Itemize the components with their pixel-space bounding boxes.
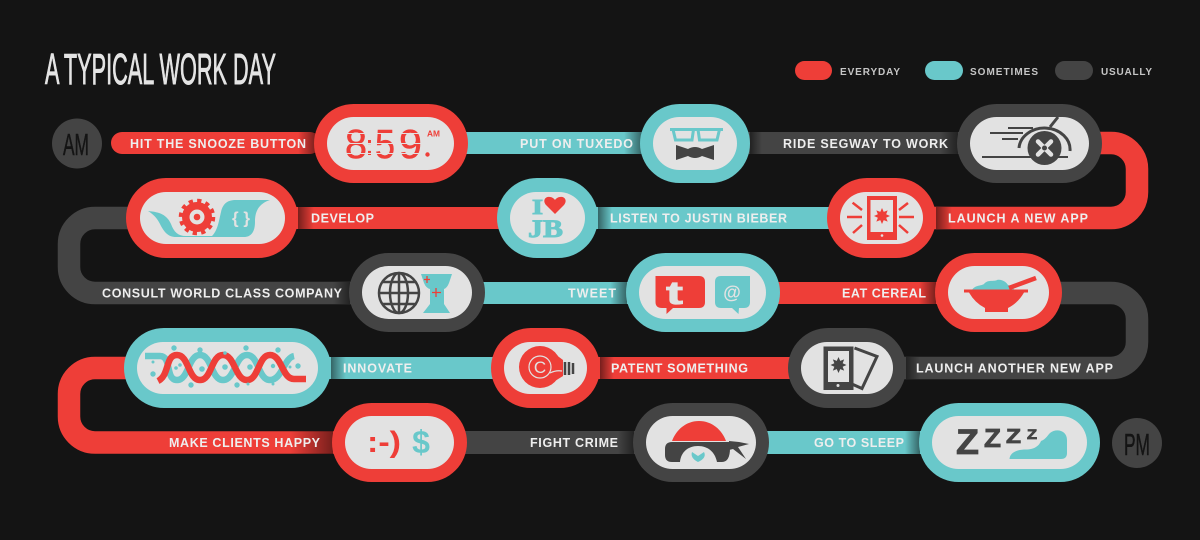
pill: develop gear <box>126 178 298 258</box>
pill: I love JB <box>497 178 598 258</box>
pill: cereal bowl <box>935 253 1062 332</box>
icon: smiley: :-) <box>367 426 401 459</box>
track: launch a new app <box>930 143 1137 229</box>
track: consult world class company <box>69 218 355 304</box>
track: patent something <box>595 357 793 379</box>
icon: letters z: Z <box>956 423 979 462</box>
track: fight crime: FIGHT CRIME <box>530 436 618 450</box>
icon: bowl <box>964 278 1036 312</box>
track: hit the snooze button: HIT THE SNOOZE BUTTON <box>130 137 306 151</box>
track: eat cereal: EAT CEREAL <box>842 286 926 300</box>
icon: at bubble: @ <box>723 282 741 302</box>
track: eat cereal <box>775 282 940 304</box>
track: launch another new app: LAUNCH ANOTHER NEW APP <box>916 362 1113 376</box>
icon: dollar: $ <box>412 424 430 460</box>
track: tweet: TWEET <box>568 286 616 300</box>
track: tweet <box>478 282 631 304</box>
track: launch a new app: LAUNCH A NEW APP <box>948 212 1088 226</box>
icon: clock reading 8:59 AM: AM <box>427 130 440 138</box>
track: patent something: PATENT SOMETHING <box>611 362 748 376</box>
AM marker <box>52 118 102 168</box>
pill: twitter and at <box>626 253 780 332</box>
pill: globe and grail <box>349 253 485 332</box>
pill: phone and tablet <box>788 328 906 408</box>
pill: zzz sleep <box>919 403 1100 482</box>
pill: patent bulb <box>491 328 600 408</box>
icon: letters z <box>956 423 1038 462</box>
icon: clock reading 8:59 AM: 8 <box>345 121 367 167</box>
icon: letters z: Z <box>1027 426 1038 442</box>
legend: USUALLY <box>1101 67 1152 78</box>
icon: I love JB: I <box>532 195 543 219</box>
legend: EVERYDAY <box>840 67 900 78</box>
AM marker: AM <box>63 127 89 162</box>
icon: twitter bubble: t <box>666 275 684 311</box>
track: innovate <box>325 357 495 379</box>
icon: teal banner <box>148 200 270 237</box>
icon: clock reading 8:59 AM <box>344 121 440 167</box>
track: go to sleep <box>764 431 924 454</box>
legend <box>795 61 1152 80</box>
track: listen to justin bieber <box>590 207 832 229</box>
icon: clock reading 8:59 AM: 5 <box>375 121 395 167</box>
track: develop: DEVELOP <box>311 212 374 226</box>
track: make clients happy <box>69 368 338 454</box>
icon: braces: { } <box>232 208 250 228</box>
pill: phone launch <box>827 178 936 258</box>
icon: I love JB: JB <box>528 216 563 243</box>
track: develop <box>290 207 502 229</box>
pill: ninja <box>633 403 769 482</box>
icon: globe <box>379 273 419 313</box>
icon: dna <box>145 345 306 388</box>
icon: clock reading 8:59 AM: 9 <box>399 121 422 167</box>
icon: copyright bulb: C <box>534 358 546 377</box>
icon: letters z: Z <box>984 423 1001 453</box>
track: hit the snooze button <box>111 132 321 154</box>
pill: smile and dollar <box>332 403 467 482</box>
icon: phone with rays <box>847 196 914 240</box>
PM marker: PM <box>1124 427 1150 462</box>
pill: dna helix <box>124 328 331 408</box>
icon: grail <box>421 274 452 313</box>
text: A TYPICAL WORK DAY <box>45 45 276 94</box>
track: consult world class company: CONSULT WORLD CLASS COMPANY <box>102 286 343 300</box>
icon: gear <box>181 201 213 233</box>
icon: segway wheel <box>982 117 1070 165</box>
track: go to sleep: GO TO SLEEP <box>814 436 904 450</box>
track: ride segway to work <box>745 132 963 154</box>
track: launch another new app <box>900 293 1137 379</box>
track: make clients happy: MAKE CLIENTS HAPPY <box>169 436 321 450</box>
icon: clock reading 8:59 AM: : <box>366 129 373 162</box>
icon: pillow <box>1010 430 1067 459</box>
track: innovate: INNOVATE <box>343 362 412 376</box>
pill: digital clock <box>314 104 468 183</box>
pill: glasses and bow tie <box>640 104 750 183</box>
icon: devices <box>824 346 877 390</box>
legend: SOMETIMES <box>970 67 1038 78</box>
icon: at bubble <box>715 276 750 314</box>
icon: letters z: Z <box>1006 426 1021 448</box>
icon: glasses <box>670 130 723 140</box>
icon: twitter bubble <box>656 275 705 314</box>
icon: bow tie <box>676 145 714 160</box>
track: ride segway to work: RIDE SEGWAY TO WORK <box>783 137 948 151</box>
icon: ninja <box>665 421 749 462</box>
PM marker <box>1112 418 1162 468</box>
track: listen to justin bieber: LISTEN TO JUSTIN BIEBER <box>610 212 787 226</box>
track: put on tuxedo <box>460 132 645 154</box>
icon: I love JB <box>528 195 566 243</box>
track: fight crime <box>460 431 638 454</box>
pill: segway <box>957 104 1102 183</box>
track: put on tuxedo: PUT ON TUXEDO <box>520 137 633 151</box>
